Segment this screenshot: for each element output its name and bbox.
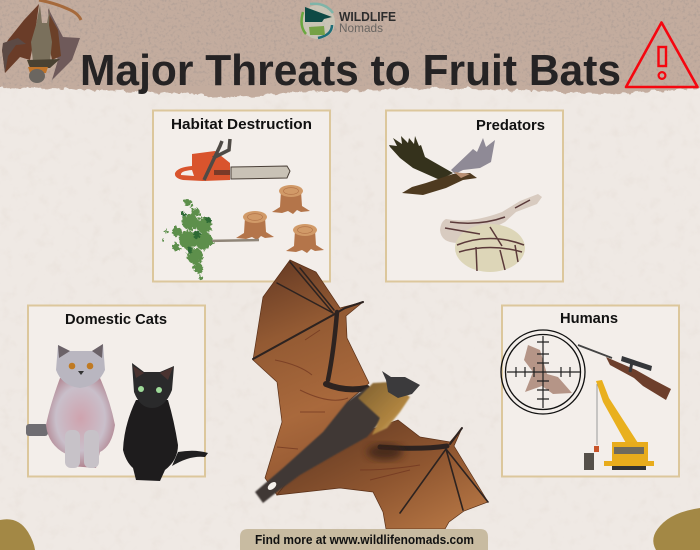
icon: warning triangle <box>626 22 698 87</box>
upper wing <box>253 260 369 495</box>
illustration: flying fruit bat <box>253 260 488 529</box>
icon: hanging bat on branch <box>2 0 81 83</box>
header band <box>0 0 700 98</box>
panel: predators <box>386 110 563 282</box>
panel: domestic cats <box>26 306 208 481</box>
wing veins <box>275 330 420 480</box>
faded bat in scope <box>524 345 572 394</box>
icon: eagle <box>389 136 495 195</box>
logo wordmark <box>339 10 396 35</box>
logo emblem <box>301 4 335 39</box>
logo: Wildlife Nomads <box>301 4 396 39</box>
wing bones <box>253 262 488 513</box>
decorative corner: left blob <box>0 519 35 550</box>
icon: tree stumps <box>236 185 324 253</box>
body <box>255 387 385 503</box>
heading: habitat destruction: Habitat Destruction <box>171 117 312 133</box>
icon: python snake <box>440 194 542 272</box>
icon: rifle scope on bat <box>501 330 585 414</box>
mantle <box>358 382 410 435</box>
icon: crane <box>584 380 654 470</box>
icon: chainsaw <box>175 139 290 181</box>
footer: website pill <box>240 529 488 550</box>
icon: black cat <box>123 363 208 481</box>
heading: domestic cats: Domestic Cats <box>65 312 167 328</box>
heading: humans: Humans <box>560 311 618 327</box>
wing shadow <box>367 444 403 460</box>
icon: felled tree <box>162 199 259 280</box>
icon: rifle <box>578 345 671 400</box>
lower wing <box>277 420 488 529</box>
tail tip <box>266 480 278 492</box>
icon: gray cat <box>26 344 115 468</box>
panel: humans <box>501 306 679 476</box>
decorative corner: right blob <box>653 508 700 550</box>
panel: habitat destruction <box>153 110 330 282</box>
logo wordmark: Nomads <box>339 21 383 35</box>
head <box>382 371 420 398</box>
footer: website pill: Find more at www.wildlifenomads.com <box>255 533 474 547</box>
logo wordmark: WILDLIFE <box>339 10 396 24</box>
heading: predators: Predators <box>476 118 545 134</box>
title: Major Threats to Fruit Bats <box>80 46 621 95</box>
